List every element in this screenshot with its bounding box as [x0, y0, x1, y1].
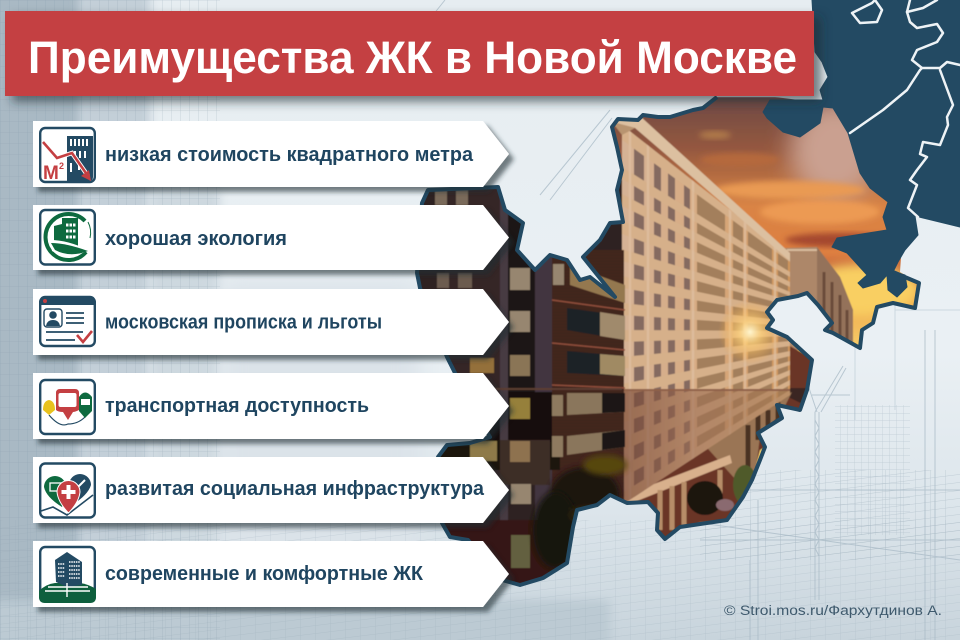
- card: modern housing: современные и комфортные ЖК: [105, 563, 424, 585]
- icon: modern tower: [39, 547, 96, 603]
- card: transport: транспортная доступность: [105, 395, 369, 417]
- icon: green building in ring: [40, 210, 95, 264]
- card: transport: [33, 373, 509, 439]
- map: border of the photo area: [417, 97, 919, 585]
- icon: map pins with cross: [40, 464, 95, 518]
- card: low price: [33, 121, 509, 187]
- icon: price falling: [40, 128, 95, 184]
- icon: transport pins: [40, 380, 95, 434]
- icon: ID document with check: [40, 296, 95, 346]
- photo credit: © Stroi.mos.ru/Фархутдинов А.: [724, 603, 942, 618]
- cornice: [612, 116, 790, 261]
- dark left building: [410, 180, 625, 590]
- main facade: [615, 118, 791, 501]
- card: ecology: хорошая экология: [105, 228, 287, 250]
- piers: [628, 131, 777, 450]
- sun glare: [720, 302, 779, 361]
- right lower building: [785, 247, 853, 350]
- window columns: [634, 130, 690, 510]
- title text: Преимущества ЖК в Новой Москве: [28, 32, 797, 83]
- floor spandrels: [622, 115, 790, 505]
- card: social infrastructure: развитая социальная инфраструктура: [105, 478, 485, 500]
- map: white district borders: [850, 0, 960, 217]
- card: ecology: [33, 205, 509, 270]
- balcony bands: [566, 308, 600, 336]
- side wall and lower floors: [628, 346, 810, 536]
- photo: apartment building at sunset in map shape: [400, 97, 930, 597]
- card: low price: низкая стоимость квадратного метра: [105, 144, 474, 166]
- card: registration: московская прописка и льготы: [105, 312, 382, 334]
- Moscow region map: navy territory: [763, 0, 960, 297]
- icon: price falling: М: [43, 163, 59, 184]
- sunset sky: [614, 97, 917, 464]
- card: registration: [33, 289, 509, 355]
- trees: [533, 455, 627, 568]
- card: social infrastructure: [33, 457, 509, 523]
- title banner: [5, 11, 814, 96]
- lit windows: [435, 190, 564, 568]
- icon: price falling: 2: [59, 161, 64, 171]
- card: modern housing: [33, 541, 509, 607]
